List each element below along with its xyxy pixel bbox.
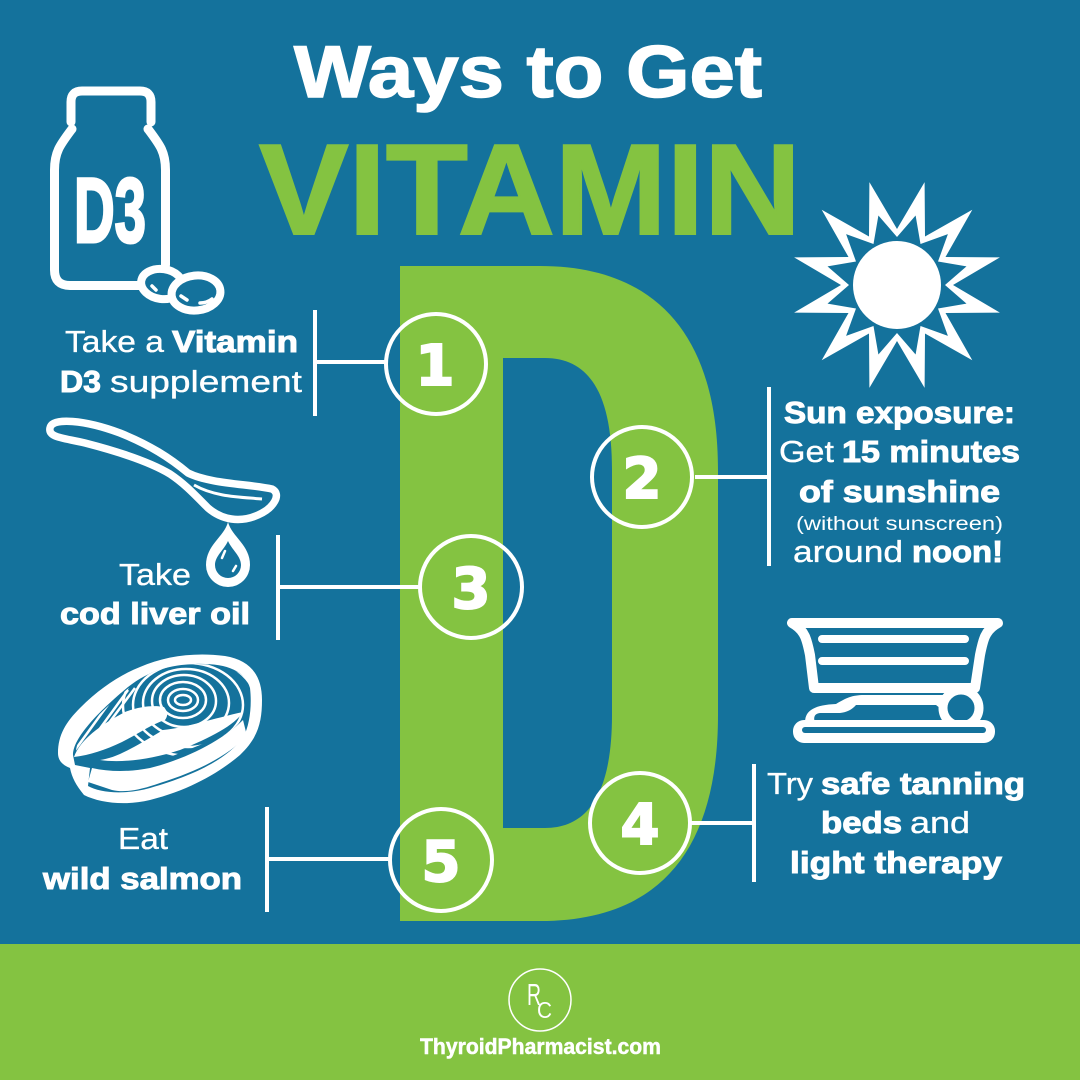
connector 5 — [267, 807, 390, 912]
number badge 5: 5 — [422, 830, 460, 895]
icon: salmon steak — [58, 654, 262, 803]
label: Take cod liver oil — [60, 557, 250, 631]
logo: RC monogram — [509, 969, 571, 1031]
title: VITAMIN: VITAMIN — [259, 118, 801, 262]
connector 1 — [315, 310, 386, 416]
label: sun exposure — [779, 395, 1020, 569]
icon: sun — [794, 182, 1000, 388]
label: Eat wild salmon: wild salmon — [42, 861, 242, 896]
label: sun exposure: 15 minutes — [842, 434, 1020, 469]
number badge 3 — [420, 536, 522, 638]
number badge 2 — [592, 427, 692, 527]
number badge 2: 2 — [623, 447, 661, 512]
giant letter D — [400, 266, 718, 921]
label: safe tanning beds and light therapy — [767, 766, 1025, 880]
label: safe tanning beds and light therapy: safe tanning — [821, 766, 1025, 801]
label: sun exposure: (without sunscreen) — [796, 514, 1003, 535]
label: Take cod liver oil: Take — [119, 557, 191, 592]
footer band — [0, 944, 1080, 1080]
label: sun exposure: around — [793, 534, 903, 569]
label: Eat wild salmon — [42, 821, 242, 896]
connector 4 — [690, 764, 754, 882]
label: Take a Vitamin D3 supplement — [60, 324, 302, 399]
icon: D3 supplement bottle: D3 — [74, 160, 146, 262]
logo: RC monogram: R — [527, 977, 541, 1012]
connector 3 — [278, 535, 420, 640]
connector 2 — [695, 387, 769, 566]
label: safe tanning beds and light therapy: beds — [821, 805, 902, 840]
number badge 3: 3 — [452, 557, 490, 622]
icon: tanning bed — [792, 623, 998, 743]
icon: spoon — [50, 421, 276, 519]
icon: D3 supplement bottle — [54, 91, 222, 313]
label: safe tanning beds and light therapy: Try — [767, 766, 814, 801]
number badge 4 — [590, 773, 690, 873]
label: sun exposure: Get — [779, 434, 834, 469]
title: Ways to Get: Ways to Get — [294, 32, 762, 113]
label: safe tanning beds and light therapy: light therapy — [790, 845, 1003, 880]
number badge 1: 1 — [416, 334, 454, 399]
label: Eat wild salmon: Eat — [118, 821, 168, 856]
label: Take a Vitamin D3 supplement: Vitamin — [172, 324, 298, 359]
number badge 1 — [386, 314, 486, 414]
label: sun exposure: of sunshine — [799, 474, 1000, 509]
footer website: ThyroidPharmacist.com — [420, 1034, 661, 1059]
number badge 4: 4 — [621, 793, 659, 858]
label: safe tanning beds and light therapy: and — [910, 805, 970, 840]
number badge 5 — [390, 809, 492, 911]
logo: RC monogram: C — [537, 997, 552, 1023]
label: Take a Vitamin D3 supplement: supplement — [110, 364, 302, 399]
label: Take cod liver oil: cod liver oil — [60, 596, 250, 631]
label: sun exposure: noon! — [912, 534, 1003, 569]
label: Take a Vitamin D3 supplement: D3 — [60, 364, 101, 399]
icon: oil drop — [206, 522, 250, 587]
label: sun exposure: Sun exposure: — [784, 395, 1015, 430]
label: Take a Vitamin D3 supplement: Take a — [65, 324, 165, 359]
